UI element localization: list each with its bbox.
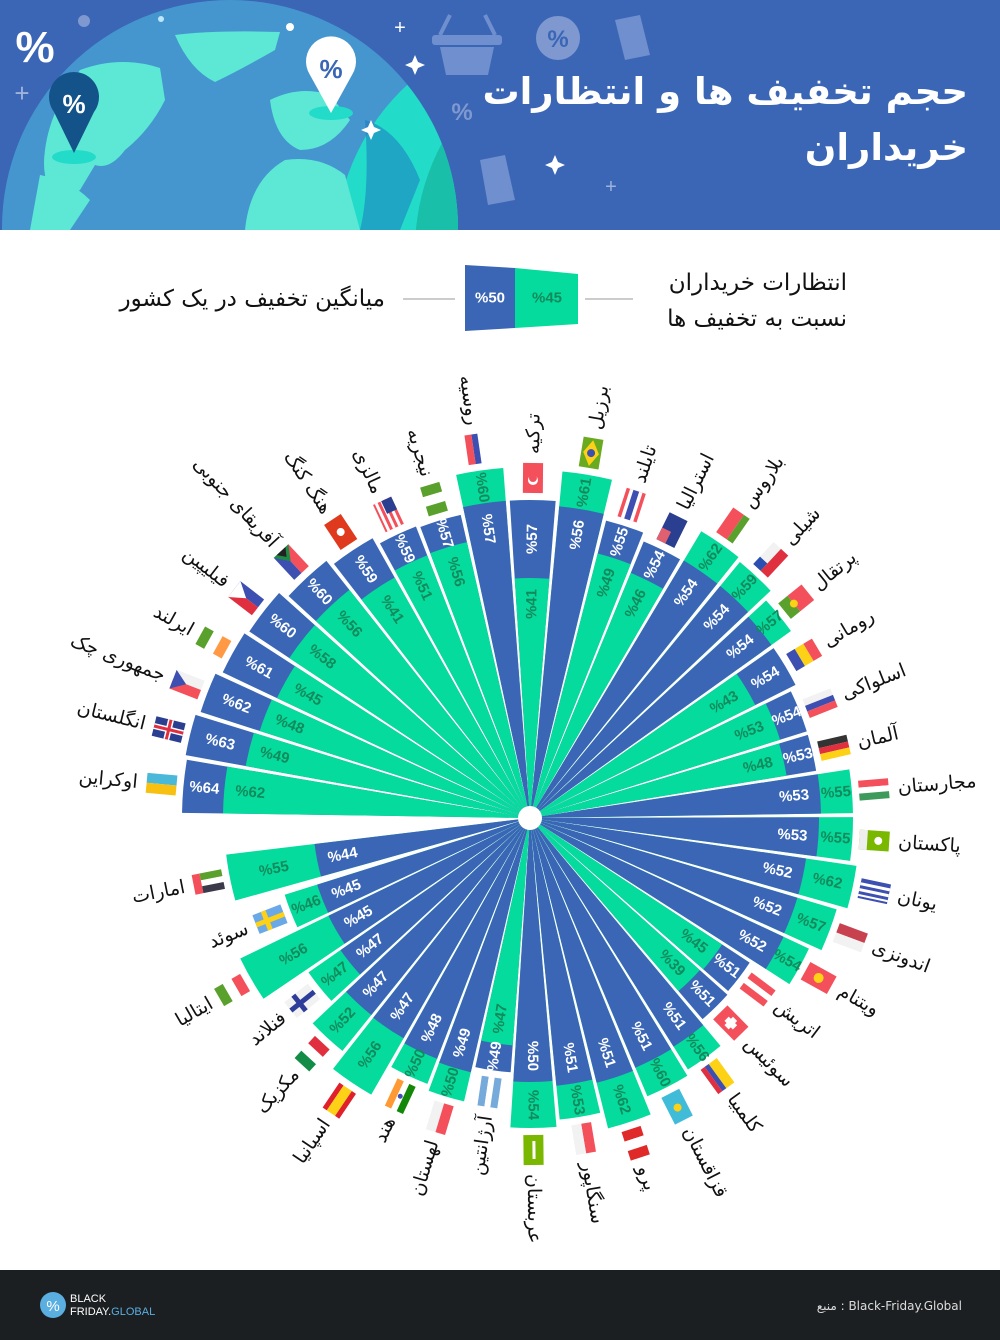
wedge: Switzerland: %39 — [655, 946, 689, 980]
wedge: Romania: رومانی — [819, 605, 878, 652]
wedge: Hong Kong: %59 — [350, 552, 381, 587]
wedge: Finland: %47 — [318, 958, 352, 991]
wedge: Nigeria: نیجریه — [402, 426, 438, 479]
wedge: Germany: آلمان — [854, 720, 901, 753]
wedge: Romania: %54 — [748, 663, 783, 693]
wedge: Singapore: سنگاپور — [577, 1159, 610, 1225]
wedge: Singapore: %51 — [559, 1041, 581, 1074]
wedge: Slovakia — [336, 624, 909, 1012]
wedge: Russia: %57 — [478, 513, 499, 545]
legend: right text: نسبت به تخفیف ها — [667, 306, 847, 332]
icon: white location pin — [306, 36, 356, 120]
wedge: Romania: %43 — [707, 687, 741, 717]
wedge: Ukraine: اوکراین — [78, 766, 139, 793]
wedge: Hungary — [346, 634, 977, 1002]
title — [482, 70, 968, 169]
wedge: Colombia: کلمبیا — [723, 1089, 767, 1138]
wedge: Sweden: %46 — [289, 892, 323, 918]
wedge: Czech Republic: %48 — [272, 711, 307, 738]
wedge: Brazil: برزیل — [584, 384, 613, 431]
wedge: Thailand: %55 — [607, 525, 632, 559]
wedge: UAE: %55 — [258, 858, 290, 880]
legend: right text — [667, 270, 847, 332]
wedge: Austria: %45 — [677, 926, 711, 957]
wedge: Switzerland: %51 — [686, 977, 719, 1010]
wedge: Sweden: %45 — [329, 876, 363, 903]
wedge: Hungary: %53 — [778, 786, 810, 806]
wedge: Brazil: %56 — [567, 519, 588, 551]
wedge: Colombia: %56 — [681, 1031, 713, 1065]
wedge: United Kingdom: انگلستان — [75, 696, 148, 735]
wedge: Austria: %51 — [709, 950, 744, 982]
wedge: Greece — [343, 631, 939, 1005]
wedge: Brazil: %61 — [574, 476, 595, 509]
icon: dark location pin: % — [62, 89, 86, 119]
wedge: Indonesia: اندونزی — [869, 936, 933, 978]
wedge: Colombia — [321, 609, 767, 1138]
wedge: Sweden: سوئد — [205, 918, 252, 953]
wedge: Malaysia — [318, 445, 742, 1030]
wedge: Kazakhstan: %60 — [645, 1056, 674, 1090]
wedge: Saudi Arabia — [362, 650, 698, 1244]
wedge: Mexico: مکزیک — [251, 1064, 304, 1118]
wedge: Ukraine: %62 — [234, 782, 266, 802]
wedge: Slovakia: اسلواکی — [838, 659, 909, 705]
wedge: Czech Republic — [67, 600, 748, 1036]
wedge: Brazil — [341, 384, 719, 1007]
wedge: Vietnam — [325, 613, 883, 1023]
wedge: Finland: %47 — [353, 930, 387, 962]
wedge: Ireland — [150, 592, 756, 1044]
header band — [0, 0, 1000, 230]
legend: blue swatch — [465, 265, 515, 331]
wedge: Pakistan: %55 — [820, 829, 851, 847]
footer — [0, 1270, 1000, 1340]
wedge: Turkey: %57 — [524, 524, 541, 554]
wedge: United Kingdom — [75, 614, 734, 1022]
wedge: Germany: %48 — [741, 754, 775, 777]
wedge: Czech Republic: جمهوری چک — [67, 629, 169, 686]
decorative percent and sparkles — [14, 15, 617, 198]
wedge: Germany — [350, 638, 901, 998]
wedge: India: %50 — [401, 1046, 430, 1081]
wedge: Italy: %56 — [276, 940, 311, 969]
wedge: Italy — [172, 594, 754, 1042]
icon: percent badge — [536, 16, 580, 60]
wedge: Austria — [348, 636, 824, 1043]
wedge: South Africa: آفریقای جنوبی — [189, 452, 285, 552]
wedge: Hong Kong — [279, 447, 755, 1043]
wedge: Turkey: ترکیه — [522, 413, 545, 454]
wedge: Austria: اتریش — [770, 995, 824, 1043]
wedge: Spain: اسپانیا — [289, 1114, 335, 1168]
legend: right text: انتظارات خریداران — [669, 270, 847, 296]
wedge: Peru — [321, 609, 739, 1193]
wedge: Colombia: %51 — [658, 999, 690, 1033]
wedge: Malaysia: مالزی — [348, 445, 388, 497]
wedge: Malaysia: %51 — [408, 569, 436, 603]
footer: logo: % — [46, 1298, 60, 1315]
wedge: Thailand: تایلند — [629, 442, 661, 486]
wedge: Poland: %49 — [450, 1026, 475, 1060]
decorative percent and sparkles: + — [394, 17, 406, 39]
globe illustration — [2, 0, 458, 230]
wedge: Switzerland: سوئیس — [740, 1033, 798, 1091]
wedge: UAE — [130, 629, 719, 1007]
wedge: Indonesia — [331, 619, 933, 1017]
legend — [118, 265, 847, 332]
legend: blue swatch: %50 — [475, 290, 505, 306]
legend: left text: میانگین تخفیف در یک کشور — [118, 285, 385, 312]
decorative percent and sparkles: + — [14, 78, 30, 108]
wedge: Portugal — [303, 546, 861, 1045]
wedge: Ireland: ایرلند — [150, 601, 198, 640]
wedge: Australia: %54 — [640, 547, 669, 582]
wedge: Spain: %56 — [355, 1038, 386, 1072]
radial chart — [67, 374, 977, 1244]
icon: basket — [432, 15, 502, 75]
icon: white location pin: % — [319, 54, 343, 84]
wedge: Poland: لهستان — [406, 1138, 443, 1198]
wedge: UAE: امارات — [130, 876, 187, 908]
wedge: Saudi Arabia: عربستان — [523, 1174, 545, 1244]
icon: dark location pin — [49, 72, 99, 164]
legend: green swatch: %45 — [532, 290, 562, 306]
wedge: Kazakhstan — [322, 610, 738, 1201]
wedge: Hong Kong: %41 — [377, 592, 407, 627]
wedge: Argentina: آرژانتین — [464, 1113, 497, 1177]
wedge: Turkey — [361, 413, 699, 987]
wedge: Nigeria — [330, 426, 730, 1018]
wedge: Hungary: مجارستان — [897, 770, 977, 798]
decorative percent and sparkles: % — [451, 99, 473, 126]
wedge: India: هند — [369, 1113, 400, 1146]
wedge: Belarus: بلاروس — [738, 452, 789, 512]
wedge: Indonesia: %57 — [794, 910, 828, 936]
wedge: Slovakia: %53 — [732, 718, 767, 745]
wedge: Peru: پرو — [632, 1162, 661, 1193]
wedge: Chile — [297, 503, 825, 1051]
wedge: Peru: %51 — [594, 1036, 619, 1070]
wedge: Portugal: %57 — [753, 607, 787, 639]
wedge: Romania — [323, 605, 878, 1025]
decorative percent and sparkles: % — [15, 23, 55, 72]
wedge: Peru: %62 — [609, 1083, 634, 1116]
decorative percent and sparkles: + — [605, 176, 617, 198]
wedge: Hong Kong: هنگ کنگ — [279, 447, 337, 518]
wedge: Vietnam: %54 — [770, 946, 805, 976]
wedge: Malaysia: %59 — [390, 532, 419, 566]
wedge: Nigeria: %57 — [432, 517, 457, 550]
wedge: Thailand: %49 — [594, 566, 619, 600]
wedge: Ireland: %61 — [242, 653, 276, 682]
wedge: Chile: %54 — [700, 600, 734, 634]
wedge: Argentina — [393, 681, 667, 1177]
wedge: Pakistan: پاکستان — [897, 831, 961, 857]
wedge: Singapore: %53 — [566, 1084, 588, 1116]
wedge: Chile: شیلی — [779, 503, 825, 550]
wedge: Spain — [289, 600, 748, 1168]
title: خریداران — [805, 126, 968, 169]
wedge: Hungary: %55 — [820, 783, 852, 802]
wedge: Finland — [244, 627, 721, 1050]
wedge: Belarus — [301, 452, 789, 1047]
wedge: Australia — [335, 450, 725, 1013]
wedge: India: %48 — [418, 1011, 446, 1045]
icon: percent badge: % — [547, 26, 569, 53]
wedge: Italy: ایتالیا — [172, 992, 217, 1031]
wedge: Portugal: پرتقال — [808, 546, 861, 595]
title: حجم تخفیف ها و انتظارات — [482, 70, 968, 113]
wedge: Czech Republic: %62 — [219, 690, 253, 717]
wedge: Pakistan: %53 — [777, 826, 808, 845]
wedge: Argentina: %49 — [484, 1040, 505, 1073]
wedge: Argentina: %47 — [490, 1003, 511, 1035]
wedge: Philippines: فیلیپین — [179, 543, 234, 592]
center burst — [518, 806, 542, 830]
footer: logo: FRIDAY.GLOBAL — [70, 1306, 155, 1318]
wedge: Saudi Arabia: %54 — [524, 1090, 542, 1121]
wedge: United Kingdom: %49 — [258, 744, 291, 767]
wedge: UAE: %44 — [326, 844, 360, 867]
wedge: Thailand — [343, 442, 717, 1005]
wedge: South Africa: %56 — [333, 607, 366, 641]
wedge: South Africa — [189, 452, 762, 1050]
wedge: Portugal: %54 — [723, 631, 758, 663]
wedge: Ukraine — [78, 641, 707, 995]
wedge: Slovakia: %54 — [770, 703, 804, 730]
wedge: United Kingdom: %63 — [204, 730, 237, 754]
wedge: Singapore — [348, 636, 712, 1225]
wedge: Poland — [355, 643, 705, 1198]
wedge: Philippines: %60 — [265, 610, 300, 642]
wedge: Pakistan — [368, 656, 961, 980]
wedge: Russia — [321, 374, 739, 1027]
icon: price tags — [480, 15, 650, 205]
wedge: Greece: %52 — [761, 859, 794, 882]
wedge: Greece: %62 — [811, 870, 844, 893]
wedge: India — [346, 634, 714, 1146]
wedge: Vietnam: %52 — [735, 926, 769, 956]
wedge: Greece: یونان — [895, 885, 939, 915]
wedge: Kazakhstan: قزاقستان — [678, 1123, 732, 1201]
wedge: Kazakhstan: %51 — [627, 1019, 656, 1054]
wedge: Switzerland — [343, 631, 798, 1091]
wedge: Mexico: %52 — [326, 1004, 359, 1037]
wedge: Belarus: %62 — [695, 540, 726, 575]
wedge: Mexico: %47 — [359, 968, 392, 1001]
wedge: Ukraine: %64 — [189, 778, 221, 798]
footer: source: منبع : Black-Friday.Global — [817, 1299, 962, 1313]
wedge: Vietnam: ویتنام — [834, 980, 883, 1020]
legend: green swatch — [515, 268, 578, 328]
footer: logo — [40, 1292, 155, 1318]
wedge: Turkey: %41 — [523, 589, 540, 619]
wedge: South Africa: %60 — [303, 575, 336, 609]
wedge: Italy: %45 — [341, 902, 376, 932]
wedge: Germany: %53 — [781, 744, 814, 768]
wedge: Nigeria: %56 — [443, 555, 468, 589]
wedge: Indonesia: %52 — [750, 893, 784, 920]
wedge: Mexico — [251, 608, 740, 1118]
wedge: Philippines: %58 — [305, 641, 339, 673]
wedge: Finland: فنلاند — [244, 1007, 290, 1050]
wedge: Russia: %60 — [472, 471, 493, 504]
wedge: Sweden — [205, 647, 701, 989]
wedge: Ireland: %45 — [291, 680, 325, 710]
wedge: Australia: استرالیا — [673, 450, 719, 513]
wedge: Australia: %46 — [621, 586, 650, 621]
wedge: Russia: روسیه — [455, 374, 484, 427]
wedge: Chile: %59 — [728, 571, 761, 604]
wedge: Belarus: %54 — [671, 575, 702, 610]
wedge: Saudi Arabia: %50 — [524, 1041, 541, 1071]
wedge: Spain: %47 — [387, 990, 418, 1024]
footer: logo: BLACK — [70, 1293, 107, 1305]
wedge: Poland: %50 — [438, 1065, 463, 1099]
wedge: Philippines — [179, 543, 764, 1052]
